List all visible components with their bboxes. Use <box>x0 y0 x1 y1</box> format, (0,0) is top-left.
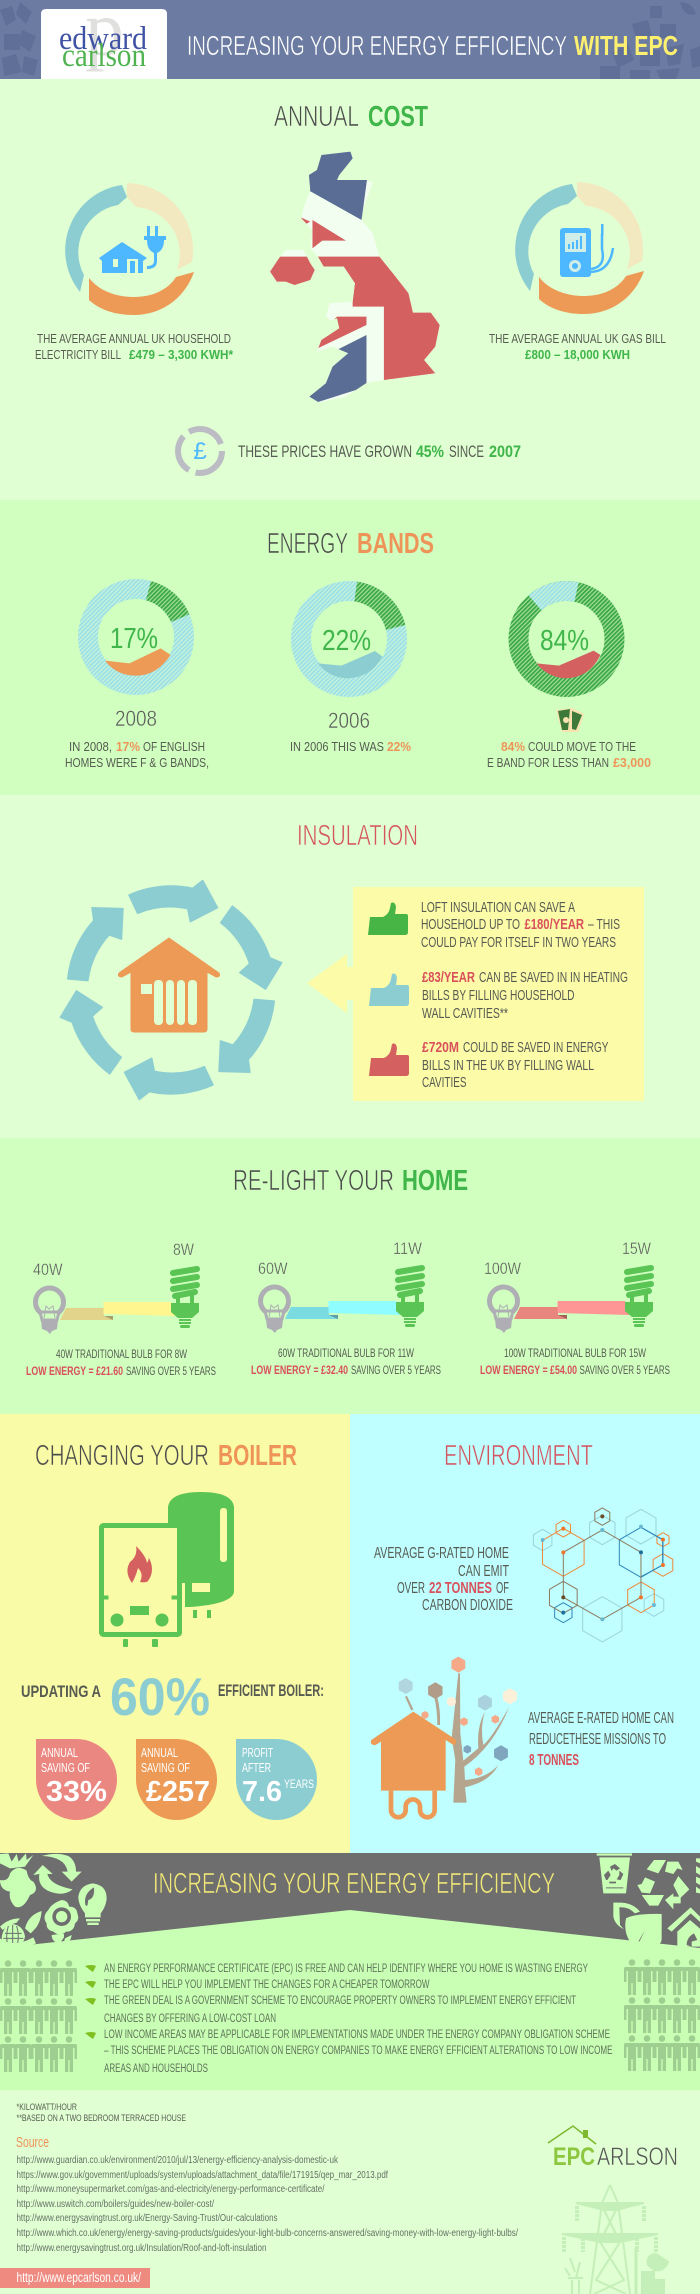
logo: EPC Carlson: EPC <box>553 2143 595 2171</box>
text: 84% band: COULD MOVE TO THE <box>528 739 636 754</box>
source links: http://www.which.co.uk/energy/energy-saving-products/guides/your-light-bulb-concerns-answered/saving-money-with-low-energy-light-bulbs/ <box>16 2228 518 2239</box>
text: 2006 band: IN 2006 THIS WAS <box>290 739 384 754</box>
bulb swap: 60W to 11W: 11W <box>393 1239 422 1258</box>
icon: banknotes <box>556 708 584 732</box>
text: 2006 band: 22% <box>387 739 411 754</box>
fact: loft insulation: COULD PAY FOR ITSELF IN TWO YEARS <box>421 935 616 951</box>
text: G-rated home: CARBON DIOXIDE <box>422 1597 513 1614</box>
text: E-rated home <box>528 1710 674 1769</box>
source links: http://www.guardian.co.uk/environment/2010/jul/13/energy-efficiency-analysis-domestic-uk <box>16 2155 339 2166</box>
fact: UK saving <box>422 1040 609 1091</box>
ring: electricity <box>65 183 194 315</box>
logo: EPC Carlson <box>548 2126 678 2171</box>
stat: 60% efficient boiler: UPDATING A <box>21 1682 101 1701</box>
bulb swap: 60W to 11W <box>258 1239 424 1333</box>
footnotes <box>16 2102 186 2124</box>
panel: footer <box>0 2090 700 2294</box>
donut: 2006 22% <box>301 591 397 687</box>
callout arrow <box>307 954 354 1013</box>
fact: wall cavities <box>422 970 628 1022</box>
header decorative icons <box>0 2 700 79</box>
icon: thumb up red <box>369 1044 409 1076</box>
heading: insulation: INSULATION <box>297 820 418 852</box>
fact: loft insulation: – THIS <box>588 917 620 933</box>
panel: environment <box>350 1414 700 1853</box>
text: 84% band: E BAND FOR LESS THAN <box>487 755 609 770</box>
panel: increasing your energy efficiency <box>0 1853 700 2090</box>
callout: prices have grown: THESE PRICES HAVE GROWN <box>238 443 412 461</box>
icon: pound cycle <box>178 429 222 473</box>
source links: https://www.gov.uk/government/uploads/system/uploads/attachment_data/file/171915/qep_mar_2013.pdf <box>16 2170 388 2181</box>
badge: annual saving £257: ANNUAL <box>141 1746 178 1760</box>
text: 60W bulb saving: 60W TRADITIONAL BULB FOR 11W <box>278 1346 414 1360</box>
bulb swap: 100W to 15W <box>484 1239 653 1333</box>
panel: re-light your home <box>0 1138 700 1414</box>
icon: people group left <box>0 1960 77 2072</box>
fact: loft insulation <box>421 900 620 951</box>
fact: wall cavities: £83/YEAR <box>422 970 475 986</box>
source links: http://www.energysavingtrust.org.uk/Energy-Saving-Trust/Our-calculations <box>16 2213 278 2224</box>
bulb swap: 40W to 8W: 8W <box>173 1240 194 1259</box>
fact: wall cavities: BILLS BY FILLING HOUSEHOLD <box>422 988 574 1004</box>
text: G-rated home: AVERAGE G-RATED HOME <box>374 1545 509 1562</box>
text: G-rated home: CAN EMIT <box>458 1563 509 1580</box>
map: UK with flag <box>270 152 440 402</box>
source links: http://www.moneysupermarket.com/gas-and-electricity/energy-performance-certificate/ <box>16 2184 325 2195</box>
illustration: pylon and factory <box>562 2185 668 2294</box>
logo: Edward Carlson: carlson <box>62 38 146 74</box>
panel: changing your boiler <box>0 1414 350 1853</box>
icon: energy meter <box>560 224 613 277</box>
illustration: house with tree <box>371 1657 517 1817</box>
donut: 2006 22%: 22% <box>322 625 371 657</box>
link bar: epcarlson <box>0 2268 150 2288</box>
logo: Edward Carlson: edward <box>59 21 147 57</box>
badge: profit after 7.6 years: 7.6 <box>242 1776 282 1808</box>
text: gas bill: £800 – 18,000 KWH <box>525 347 630 362</box>
donut: 2008 17%: 17% <box>110 623 158 655</box>
badge: profit after 7.6 years: PROFIT <box>242 1746 273 1760</box>
diagram: carbon hexagon molecule <box>533 1508 673 1642</box>
year label: 2008: 2008 <box>115 706 157 731</box>
fact: loft insulation: £180/YEAR <box>524 917 584 933</box>
text: 84% band: £3,000 <box>613 755 651 770</box>
year label: 2006: 2006 <box>328 708 370 733</box>
callout: prices have grown: SINCE <box>449 443 484 461</box>
stat: 60% efficient boiler: 60% <box>110 1668 210 1727</box>
icon: house with plug <box>99 226 166 273</box>
text: gas bill <box>489 331 666 362</box>
bulb swap: 40W to 8W: 40W <box>33 1260 62 1279</box>
text: electricity bill <box>35 331 234 362</box>
fact: UK saving: CAVITIES <box>422 1075 466 1091</box>
text: 60W bulb saving: LOW ENERGY = £32.40 <box>251 1363 348 1377</box>
stat: 60% efficient boiler: EFFICIENT BOILER: <box>218 1681 324 1700</box>
heading: re-light your home: HOME <box>402 1165 468 1197</box>
heading: changing your boiler: BOILER <box>218 1440 297 1472</box>
text: 100W bulb saving: LOW ENERGY = £54.00 <box>480 1363 577 1377</box>
bullet list: efficiency facts <box>85 1963 613 2075</box>
text: electricity bill: ELECTRICITY BILL <box>35 347 121 362</box>
logo: Edward Carlson <box>41 0 167 79</box>
fact: UK saving: £720M <box>422 1040 459 1056</box>
panel: insulation <box>0 795 700 1138</box>
fact: wall cavities: WALL CAVITIES** <box>422 1006 508 1022</box>
link bar: epcarlson: http://www.epcarlson.co.uk/ <box>16 2270 141 2285</box>
icon: people group right <box>624 1959 700 2071</box>
heading: annual cost: COST <box>368 101 428 133</box>
text: 60W bulb saving: SAVING OVER 5 YEARS <box>351 1363 441 1377</box>
icon: thumb up blue <box>369 974 409 1006</box>
bullet list: efficiency facts: AREAS AND HOUSEHOLDS <box>104 2063 208 2075</box>
stat: 60% efficient boiler <box>21 1668 324 1727</box>
panel: annual cost <box>36 106 666 476</box>
banner icons right <box>597 1853 700 1947</box>
text: 84% band <box>487 739 651 770</box>
badge: annual saving 33% <box>36 1739 117 1820</box>
donut: 84%: 84% <box>540 625 589 657</box>
panel: insulation facts <box>353 887 644 1101</box>
logo: EPC Carlson: ARLSON <box>597 2143 678 2171</box>
bullet list: efficiency facts: CHANGES BY OFFERING A LOW-COST LOAN <box>104 2013 276 2025</box>
heading: re-light your home: RE-LIGHT YOUR <box>233 1165 394 1197</box>
heading: energy bands: BANDS <box>357 528 434 560</box>
fact: loft insulation: LOFT INSULATION CAN SAVE A <box>421 900 575 916</box>
text: 40W bulb saving: SAVING OVER 5 YEARS <box>126 1364 216 1378</box>
fact: UK saving: COULD BE SAVED IN ENERGY <box>463 1040 609 1056</box>
cycle arrows <box>53 880 289 1100</box>
bulb swap: 40W to 8W <box>33 1240 199 1334</box>
badge: annual saving 33%: SAVING OF <box>41 1761 90 1775</box>
source links: http://www.energysavingtrust.org.uk/Insulation/Roof-and-loft-insulation <box>16 2243 266 2254</box>
text: E-rated home: 8 TONNES <box>529 1752 579 1769</box>
text: 2008 band: OF ENGLISH <box>143 739 205 754</box>
badge: annual saving £257: SAVING OF <box>141 1761 190 1775</box>
text: 2008 band: HOMES WERE F & G BANDS, <box>65 755 209 770</box>
text: electricity bill: £479 – 3,300 KWH* <box>129 347 234 362</box>
badge: profit after 7.6 years: YEARS <box>284 1777 314 1791</box>
text: 40W bulb saving: LOW ENERGY = £21.60 <box>26 1364 123 1378</box>
text: G-rated home <box>374 1545 513 1614</box>
icon: boiler <box>102 1492 234 1647</box>
text: 40W bulb saving <box>26 1347 216 1378</box>
bulb swap: 60W to 11W: 60W <box>258 1259 288 1278</box>
icon: thumb up green <box>368 902 408 935</box>
text: 2008 band <box>65 739 209 770</box>
source links: http://www.uswitch.com/boilers/guides/new-boiler-cost/ <box>16 2199 214 2210</box>
badge: profit after 7.6 years: AFTER <box>242 1761 271 1775</box>
icon: house with radiator <box>118 938 220 1032</box>
fact: loft insulation: HOUSEHOLD UP TO <box>421 917 520 933</box>
panel: header <box>0 0 700 79</box>
badge: profit after 7.6 years <box>236 1739 317 1820</box>
heading: environment: ENVIRONMENT <box>444 1440 593 1472</box>
text: electricity bill: THE AVERAGE ANNUAL UK HOUSEHOLD <box>37 331 231 346</box>
text: G-rated home: OF <box>496 1580 509 1597</box>
banner: grey chevron <box>0 1853 700 1948</box>
text: 2008 band: 17% <box>116 739 140 754</box>
text: 100W bulb saving <box>480 1346 670 1377</box>
text: 60W bulb saving <box>251 1346 441 1377</box>
donut: 2008 17% <box>88 589 184 685</box>
text: G-rated home: OVER <box>397 1580 425 1597</box>
heading: annual cost: ANNUAL <box>274 101 359 133</box>
heading: source: Source <box>16 2134 49 2151</box>
badge: annual saving 33%: 33% <box>46 1776 107 1808</box>
badge: annual saving 33%: ANNUAL <box>41 1746 78 1760</box>
bullet list: efficiency facts: THE EPC WILL HELP YOU IMPLEMENT THE CHANGES FOR A CHEAPER TOMORROW <box>104 1979 430 1991</box>
banner icons left <box>0 1853 107 1949</box>
badge: annual saving £257: £257 <box>146 1776 210 1808</box>
bulb swap: 100W to 15W: 15W <box>622 1239 651 1258</box>
footnotes: **BASED ON A TWO BEDROOM TERRACED HOUSE <box>16 2113 186 2124</box>
icon: pound cycle: £ <box>193 438 207 465</box>
source links <box>16 2155 518 2254</box>
panel: energy bands <box>0 500 700 795</box>
footnotes: *KILOWATT/HOUR <box>16 2102 77 2113</box>
fact: wall cavities: CAN BE SAVED IN IN HEATING <box>479 970 628 986</box>
badge: annual saving £257 <box>136 1739 217 1820</box>
text: G-rated home: 22 TONNES <box>429 1580 492 1597</box>
text: 2008 band: IN 2008, <box>69 739 112 754</box>
heading: changing your boiler: CHANGING YOUR <box>35 1440 209 1472</box>
ring: gas <box>515 182 644 314</box>
heading: energy bands: ENERGY <box>267 528 348 560</box>
text: 84% band: 84% <box>501 739 525 754</box>
bulb swap: 100W to 15W: 100W <box>484 1259 521 1278</box>
callout: prices have grown: 45% <box>416 443 444 461</box>
fact: UK saving: BILLS IN THE UK BY FILLING WALL <box>422 1058 594 1074</box>
donut: 84% <box>518 591 614 687</box>
text: 40W bulb saving: 40W TRADITIONAL BULB FOR 8W <box>56 1347 187 1361</box>
callout: prices have grown: 2007 <box>489 443 521 461</box>
